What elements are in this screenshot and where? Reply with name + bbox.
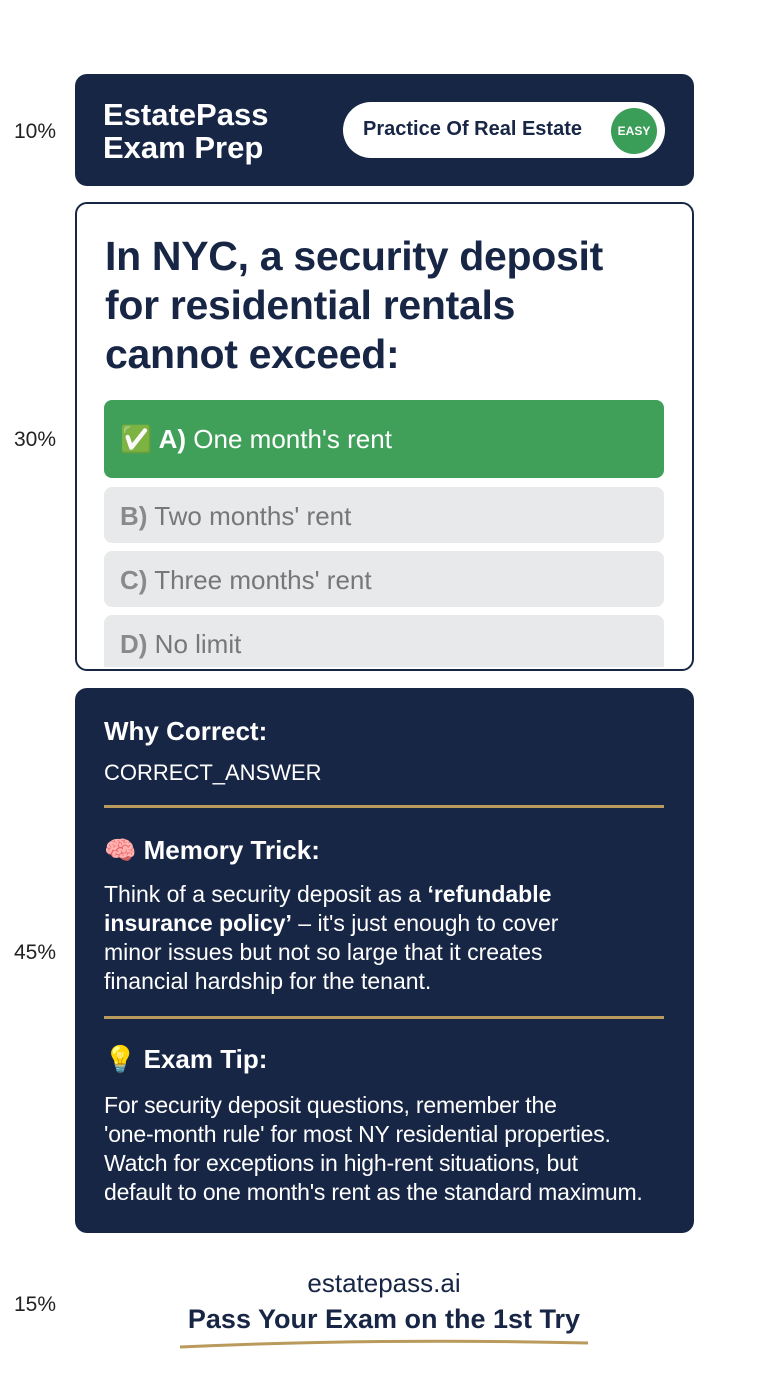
question text: for residential rentals bbox=[105, 282, 515, 328]
memory trick text: insurance policy’ – it's just enough to cover bbox=[104, 910, 558, 936]
explanation panel bbox=[75, 688, 694, 1233]
memory trick text: Think of a security deposit as a ‘refundable bbox=[104, 881, 551, 907]
brand title: Exam Prep bbox=[103, 130, 263, 165]
memory trick text: minor issues but not so large that it creates bbox=[104, 939, 542, 965]
option C bbox=[104, 551, 664, 607]
category pill: Practice Of Real Estate bbox=[363, 118, 582, 140]
exam tip heading: 💡 Exam Tip: bbox=[104, 1044, 267, 1074]
why correct heading: Why Correct: bbox=[104, 716, 267, 746]
header panel bbox=[75, 74, 694, 186]
question text: In NYC, a security deposit bbox=[105, 233, 603, 279]
option B bbox=[104, 487, 664, 543]
exam tip text: Watch for exceptions in high-rent situations, but bbox=[104, 1150, 578, 1176]
label: 10%: 10% bbox=[14, 120, 56, 143]
label: 15%: 15% bbox=[14, 1293, 56, 1316]
memory trick text: financial hardship for the tenant. bbox=[104, 968, 431, 994]
question text: cannot exceed: bbox=[105, 331, 399, 377]
memory trick text bbox=[104, 881, 558, 994]
exam tip text: For security deposit questions, remember the bbox=[104, 1092, 557, 1118]
brand title bbox=[103, 97, 268, 165]
question text bbox=[105, 233, 603, 377]
category pill bbox=[343, 102, 665, 158]
option A correct: ✅ A) One month's rent bbox=[120, 424, 392, 454]
option C: C) Three months' rent bbox=[120, 565, 372, 595]
brand title: EstatePass bbox=[103, 97, 268, 132]
underline swoosh bbox=[180, 1340, 588, 1348]
memory trick heading: 🧠 Memory Trick: bbox=[104, 835, 320, 865]
exam tip text: 'one-month rule' for most NY residential properties. bbox=[104, 1121, 611, 1147]
question panel bbox=[75, 202, 694, 671]
exam tip text bbox=[104, 1092, 643, 1205]
why correct text: CORRECT_ANSWER bbox=[104, 760, 322, 785]
easy badge bbox=[611, 108, 657, 154]
exam tip text: default to one month's rent as the standard maximum. bbox=[104, 1179, 643, 1205]
option B: B) Two months' rent bbox=[120, 501, 351, 531]
easy badge: EASY bbox=[618, 124, 650, 138]
label: 30%: 30% bbox=[14, 428, 56, 451]
option D bbox=[104, 615, 664, 667]
option D: D) No limit bbox=[120, 629, 241, 659]
footer tagline: Pass Your Exam on the 1st Try bbox=[188, 1304, 580, 1334]
option A correct bbox=[104, 400, 664, 478]
label: 45%: 45% bbox=[14, 941, 56, 964]
footer url: estatepass.ai bbox=[307, 1268, 461, 1298]
